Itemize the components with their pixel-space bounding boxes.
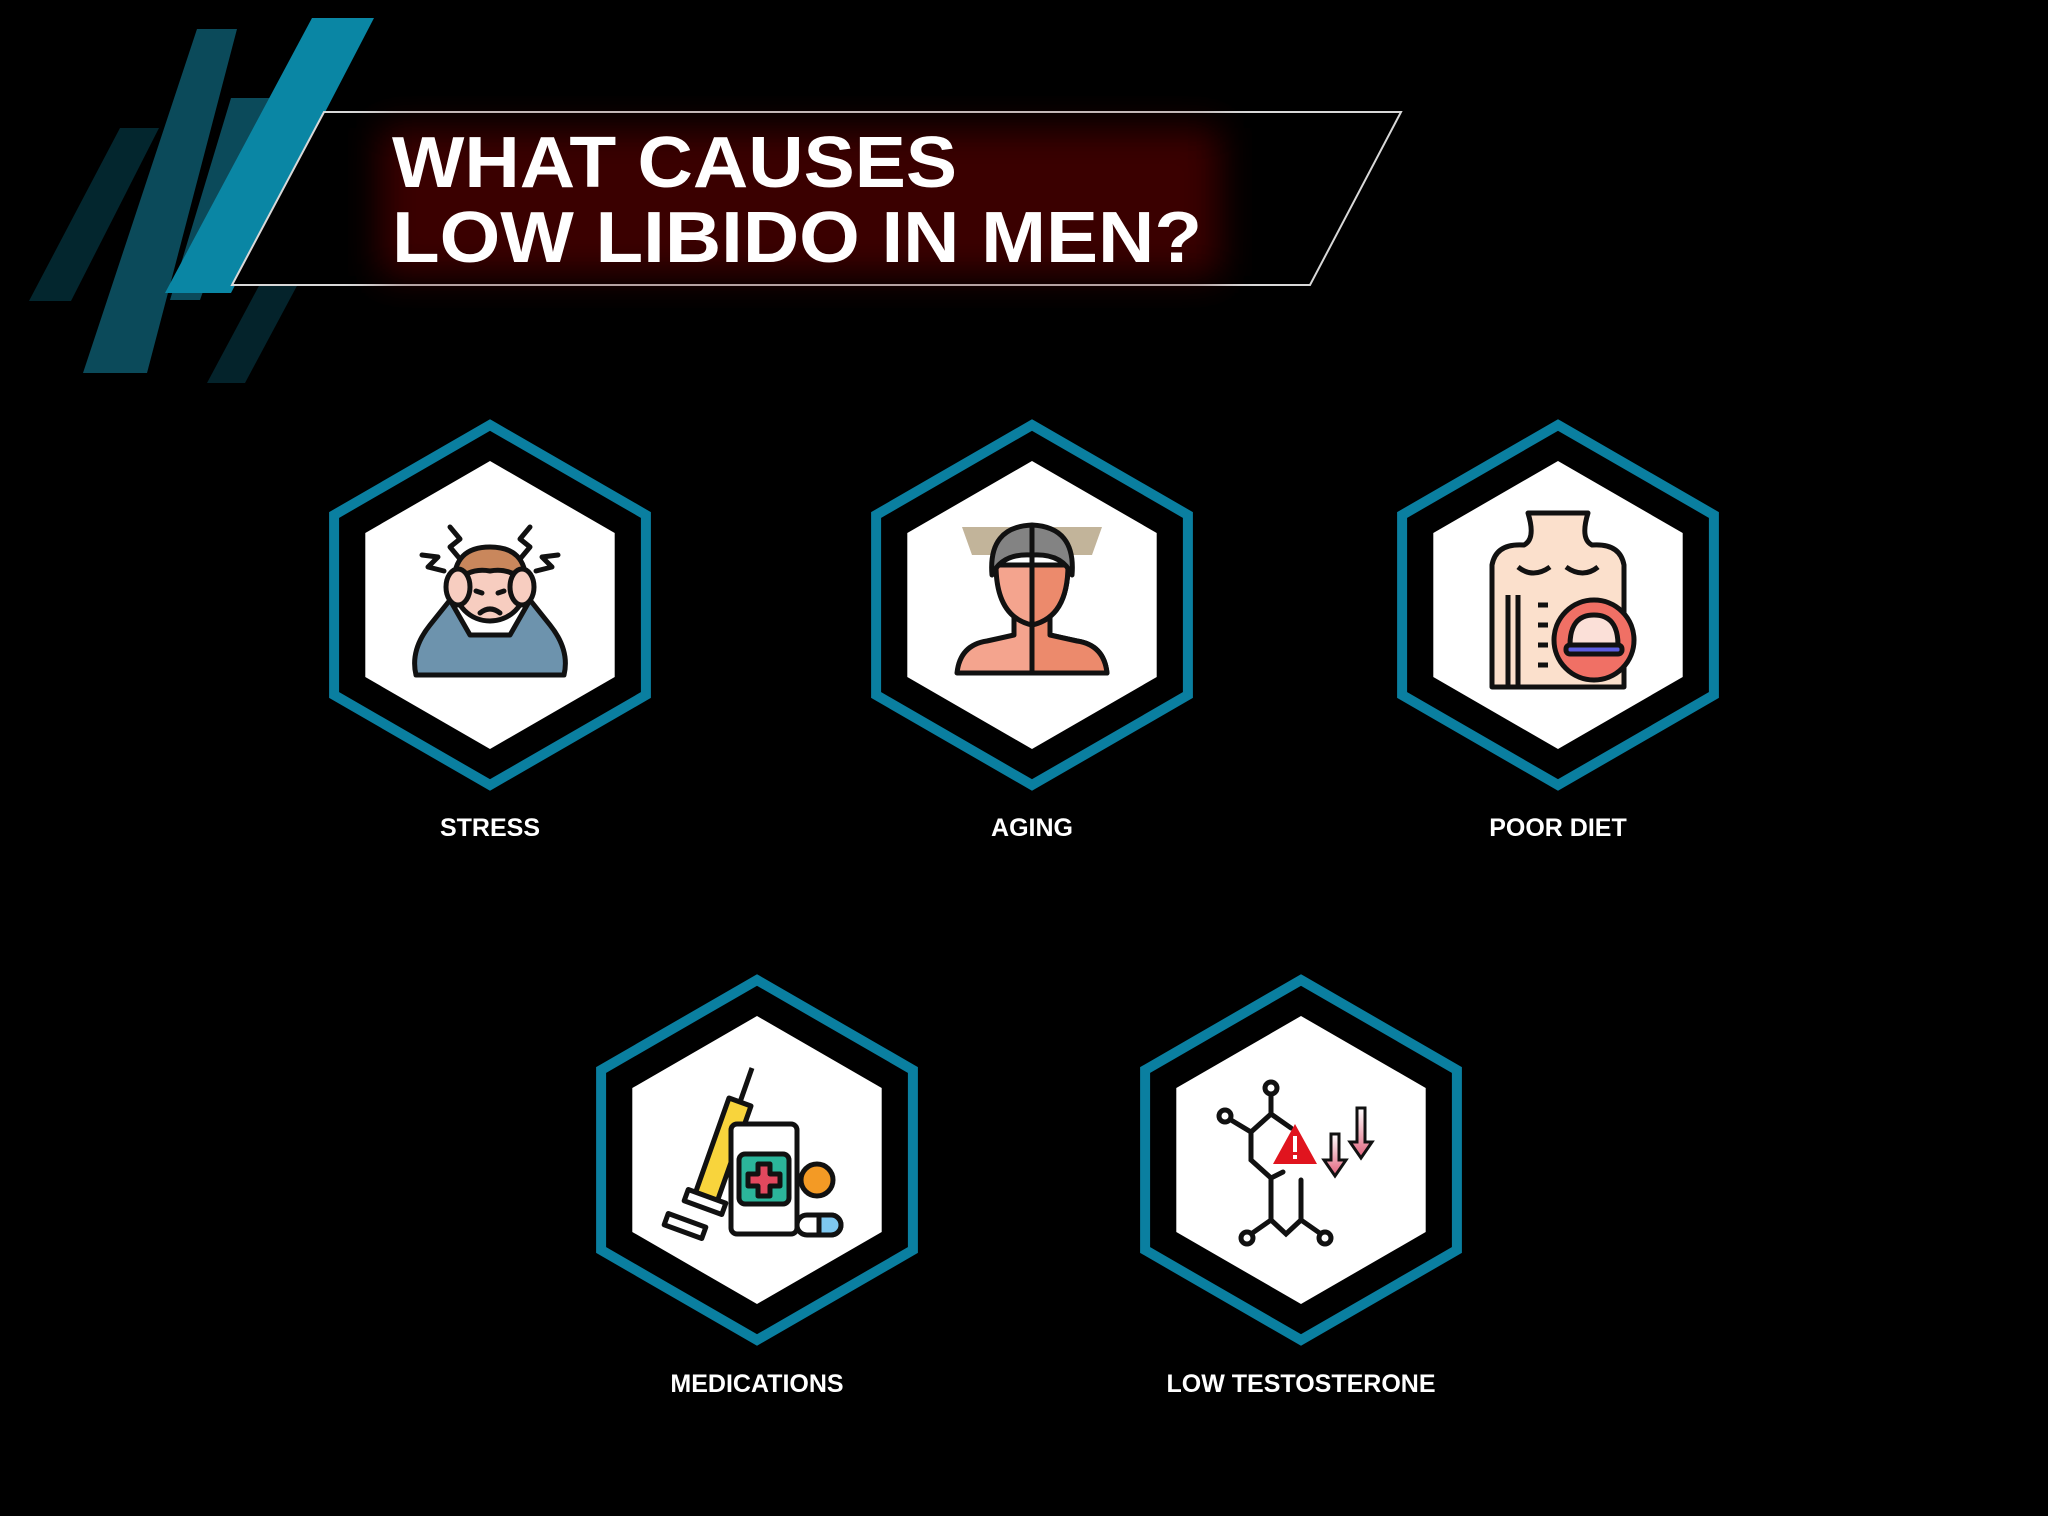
decorative stripes [29,18,374,383]
icon: torso with food [1492,513,1634,687]
label: poor diet: POOR DIET [1489,814,1627,842]
title: WHAT CAUSES [392,123,957,203]
label: medications: MEDICATIONS [670,1370,844,1398]
panel: stress [334,425,646,785]
panel: aging [876,425,1188,785]
panel: poor diet [1402,425,1714,785]
label: stress: STRESS [440,814,540,842]
title banner: LOW LIBIDO IN MEN? [392,198,1202,278]
label: low testosterone: LOW TESTOSTERONE [1166,1370,1436,1398]
label: aging: AGING [991,814,1073,842]
panel: medications [601,980,913,1340]
icon: half-aged face [957,525,1107,675]
panel: low testosterone [1145,980,1457,1340]
icon: syringe and pills [664,1068,841,1238]
icon: molecule with warning [1219,1082,1331,1244]
icon: warning triangle [1273,1124,1317,1164]
icon: stressed man [415,527,565,675]
title banner [232,112,1401,285]
icon: down arrows [1324,1108,1372,1176]
